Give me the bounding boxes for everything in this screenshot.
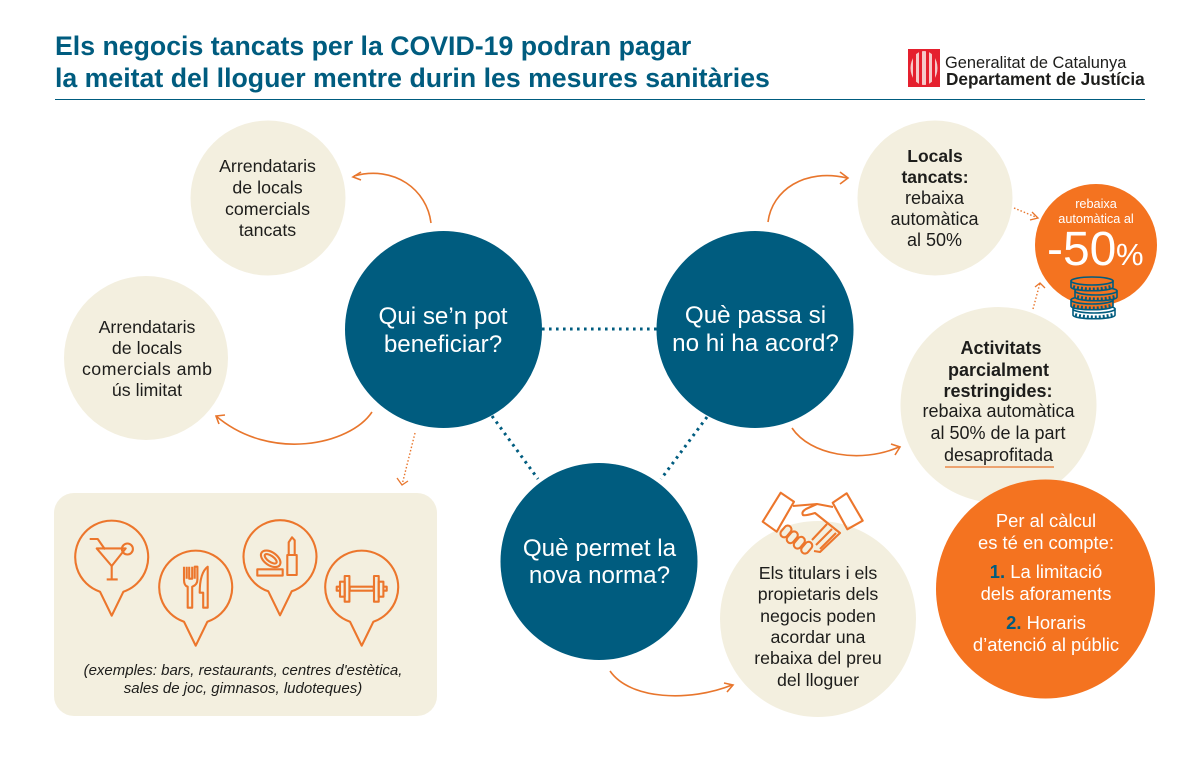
panel: acord: negocis poden [760, 606, 876, 626]
panel: activitats parcialment restringides: al 50% de la part [930, 423, 1066, 443]
panel: activitats parcialment restringides: restringides: [943, 381, 1053, 401]
arrow: dotted to -50 from activitats [1033, 283, 1045, 309]
panel: arrendataris tancats [190, 120, 346, 276]
panel: acord [720, 521, 916, 717]
logo: Generalitat de Catalunya: Departament de Justícia [946, 69, 1145, 89]
heading circle: que permet la nova norma [500, 463, 698, 660]
panel: locals tancats: rebaixa [905, 188, 965, 208]
title: la meitat del lloguer mentre durin les mesures sanitàries [55, 63, 770, 93]
arrow: dotted to exemples [397, 433, 415, 485]
panel: locals tancats: Locals [907, 146, 963, 166]
callout: calcul: d’atenció al públic [973, 634, 1119, 655]
arrow: to arrendataris us limitat [216, 412, 372, 444]
callout: -50%: automàtica al [1058, 212, 1134, 226]
heading circle: que passa si no hi ha acord [656, 231, 854, 428]
panel: acord: Els titulars i els [759, 563, 877, 583]
panel: acord: propietaris dels [758, 584, 878, 604]
panel: acord: rebaixa del preu [754, 648, 882, 668]
panel: locals tancats: automàtica [890, 209, 980, 229]
icon: dumbbell pin [325, 551, 398, 646]
callout: calcul: es té en compte: [978, 532, 1114, 553]
panel: locals tancats: al 50% [907, 230, 962, 250]
callout: calcul: dels aforaments [981, 583, 1111, 604]
caption: sales de joc, gimnasos, ludoteques) [124, 680, 362, 697]
arrow: to locals tancats [768, 172, 848, 222]
title: Els negocis tancats per la COVID-19 podran pagar [55, 31, 691, 61]
panel: acord: del lloguer [777, 670, 859, 690]
panel: locals tancats: tancats: [901, 167, 969, 187]
panel: arrendataris tancats: Arrendataris [219, 156, 316, 176]
callout: -50% [1035, 184, 1157, 319]
icon: cutlery pin [159, 551, 232, 646]
panel: arrendataris us limitat: Arrendataris [99, 317, 196, 337]
heading circle: qui se'n pot beneficiar: Qui se’n pot [378, 303, 508, 330]
icon: handshake [763, 493, 863, 555]
heading circle: que permet la nova norma: nova norma? [529, 562, 670, 589]
heading circle: qui se'n pot beneficiar [345, 231, 542, 428]
heading circle: que permet la nova norma: Què permet la [523, 535, 677, 562]
icon: coins [1071, 277, 1117, 319]
panel: arrendataris tancats: comercials [225, 199, 310, 219]
heading circle: que passa si no hi ha acord: Què passa si [685, 302, 826, 329]
caption: (exemples: bars, restaurants, centres d'estètica, [84, 662, 402, 679]
arrow: to activitats [792, 428, 900, 456]
heading circle: que passa si no hi ha acord: no hi ha acord? [672, 330, 839, 357]
panel: activitats parcialment restringides: parcialment [948, 360, 1049, 380]
panel: activitats parcialment restringides: desaprofitada [944, 445, 1054, 465]
icon: cocktail pin [75, 521, 148, 616]
arrow: to arrendataris tancats [353, 172, 431, 223]
panel: activitats parcialment restringides: Activitats [960, 338, 1042, 358]
panel: acord: acordar una [771, 627, 866, 647]
panel: arrendataris us limitat: de locals [112, 338, 182, 358]
panel: arrendataris us limitat: ús limitat [112, 380, 182, 400]
panel: arrendataris us limitat: comercials amb [82, 359, 212, 379]
arrow: to acord [610, 671, 733, 696]
callout: calcul [936, 480, 1155, 698]
heading circle: qui se'n pot beneficiar: beneficiar? [384, 331, 502, 358]
arrow: dotted to -50 from locals [1014, 208, 1038, 220]
callout: -50%: rebaixa [1075, 197, 1118, 211]
panel: arrendataris us limitat [64, 276, 228, 440]
callout: calcul: 1. La limitació [990, 561, 1102, 582]
icon: cosmetics pin [244, 520, 316, 615]
callout: calcul: Per al càlcul [996, 510, 1096, 531]
panel: exemples [54, 493, 437, 716]
callout: -50%: -50 [1047, 223, 1116, 276]
panel: locals tancats [858, 120, 1012, 276]
logo: Generalitat de Catalunya [908, 49, 1145, 89]
logo: Generalitat de Catalunya: Generalitat de Catalunya [945, 54, 1127, 72]
title [55, 31, 770, 93]
panel: activitats parcialment restringides: rebaixa automàtica [922, 401, 1076, 421]
callout: -50%: % [1116, 237, 1144, 272]
caption [84, 662, 402, 697]
panel: arrendataris tancats: de locals [232, 178, 303, 198]
callout: calcul: 2. Horaris [1006, 612, 1086, 633]
panel: arrendataris tancats: tancats [239, 220, 296, 240]
panel: activitats parcialment restringides [900, 307, 1096, 503]
